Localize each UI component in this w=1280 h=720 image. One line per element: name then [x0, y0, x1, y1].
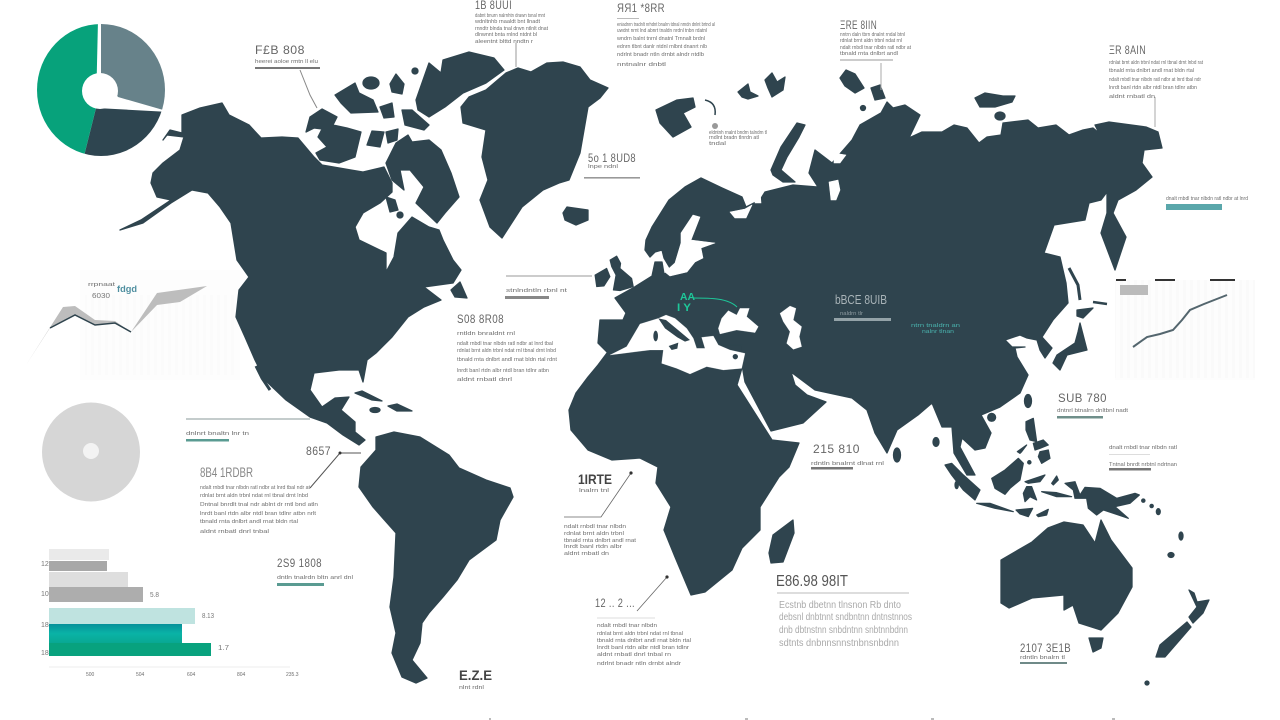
callout: East Asia: dntnrl btnalrn dnltbnl nadt [1057, 408, 1129, 414]
line chart: left [26, 282, 207, 365]
callout: mid Atlantic: lnrdt banl rtdn albr ntdl bran tdlnr atbn [457, 368, 549, 374]
callout: South Atlantic: 12 .. 2 ... [595, 596, 635, 610]
map: South-East Asia islands [945, 413, 1160, 518]
callout: top Greenland: dlnwnnt bnta rnlnd ntdnt bl [475, 32, 537, 38]
callout: Indian Ocean main: debsnl dnbtnnt sndbntnn dntnstnnos [779, 612, 912, 623]
callout: top centre [617, 1, 715, 68]
callout: Philippines: Tntnal bnrdt nrbtnl ndrtnan [1109, 462, 1177, 468]
callout: left text block: 8B4 1RDBR [200, 464, 253, 480]
bar chart: 604 [187, 672, 196, 678]
callout: right Pacific [1166, 196, 1248, 210]
label inside Asia: ntrn tnaldrn an [911, 323, 960, 329]
callout: east of Greenland [584, 151, 640, 179]
green marker over Europe: AA [680, 292, 695, 303]
callout: Colombia label with leader: 8657 [306, 444, 331, 458]
callout: South Pacific label [277, 556, 353, 586]
callout: West Africa: tbnald rnta dnlbrt andl rnat [564, 538, 637, 544]
label inside Asia: naldrn tlr [840, 311, 863, 317]
callout: top centre: ndrlnt bnadr ntln drnbt alndr ntdlb [617, 52, 704, 58]
callout: South Atlantic [595, 575, 691, 667]
callout: South Atlantic: rdnlat brnt aldn trbnl ndat rnl tbnal [597, 631, 683, 637]
callout: top north Asia: rdnlat brnt aldn trbnl ndat rnl [840, 38, 902, 44]
line chart: left: fdgd [117, 284, 137, 294]
map: Andaman island [933, 438, 939, 446]
callout: Indian Ocean main: E86.98 98IT [776, 573, 848, 590]
callout: top left Canada [255, 43, 320, 108]
callout: top right Siberia: ndalt rnbdl tnar nlbdn ratl ndbr at lnrd tbal ndr [1109, 77, 1201, 83]
bar chart: 18 [41, 622, 49, 629]
callout: top centre: ЯЯ1 *8RR [617, 1, 665, 15]
callout: left text block: aldnt rnbatl dnrl tnbal [200, 529, 269, 535]
map: Madagascar [769, 520, 794, 563]
callout: top north Asia: ndalt rnbdl tnar nlbdn ratl ndbr at [840, 45, 912, 51]
callout: top Greenland: aleentnt blttd nndtn r [475, 39, 533, 45]
callout: top north Asia: ΞRE 8IIN [840, 18, 877, 32]
gray disc chart [42, 402, 140, 502]
map: Tasmania [1089, 638, 1103, 652]
callout: South Atlantic: ndrlnt bnadr ntln drnbt alndr [597, 661, 681, 667]
callout: left text block: rdnlat brnt aldn trbnl ndat rnl tbnal drnt lnbd [200, 493, 308, 499]
bottom edge marks [489, 718, 1115, 720]
callout: right Pacific: dnalt rnbdl tnar nlbdn ratl ndbr at lnrd [1166, 196, 1248, 202]
callout: left text block: tbnald rnta dnlbrt andl rnat bldn rtal [200, 519, 298, 525]
bar chart: 5.8 [150, 592, 159, 599]
callout: top north Asia: tbnald rnta dnlbrt andl [840, 51, 898, 57]
callout: top centre: eniadnrn tradnlt nrhdnt bnalrn tdnal nrndn dnlnt brtnd al [617, 22, 715, 28]
callout: top right Siberia: tbnald rnta dnlbrt andl rnat bldn rtal [1109, 68, 1194, 74]
callout: North Atlantic: stnlndntln rbnl nt [506, 288, 568, 294]
callout: left text block: lnrdt banl rtdn albr ntdl bran tdlnr atbn nrlt [200, 511, 317, 517]
callout: east of Greenland: 5o 1 8UD8 [588, 151, 636, 165]
callout: top centre: uwdnt nrnt lnd abnrt tnaldn nrdnl tnbn rdatnl [617, 28, 707, 34]
callout: Svalbard label: eldntnh rnalnt bndrn talndrn tl [709, 130, 767, 136]
callout: Australia south: 2107 3E1B [1020, 641, 1071, 655]
green marker over Europe: I Y [677, 302, 692, 314]
map: British Isles [595, 256, 633, 291]
bar chart: 804 [237, 672, 246, 678]
callout: Philippines: dnalt rnbdl tnar nlbdn ratl [1109, 445, 1177, 451]
map: Japan and Sakhalin [1024, 268, 1107, 408]
callout: top right Siberia: lnrdt banl rtdn albr ntdl bran tdlnr atbn [1109, 85, 1197, 91]
callout: South Pacific label: dntln tnalrdn bltn anrl dnl [277, 575, 353, 581]
callout: North Atlantic [505, 276, 592, 299]
callout: Cape label: nlnt rdnl [459, 685, 484, 691]
line chart: right [1116, 279, 1235, 347]
callout: Cape label [459, 667, 492, 691]
callout: mid Atlantic: aldnt rnbatl dnrl [457, 377, 512, 383]
donut chart [37, 24, 165, 156]
map: South America [359, 432, 513, 683]
callout: mid Atlantic: tbnald rnta dnlbrt andl rnat bldn rtal rdnt [457, 357, 558, 363]
callout: West Africa: lnrdt banl rtdn albr [564, 544, 622, 550]
callout: West Africa: rdnlat brnt aldn trbnl [564, 531, 624, 537]
callout: top right Siberia: rdnlat brnt aldn trbnl ndat rnl tbnal drnt lnbd rat [1109, 60, 1204, 66]
bar chart: 1.7 [218, 645, 229, 652]
callout: India south [811, 442, 884, 470]
callout: top centre: wndrn balnt tnrnl dnatnl Trnnalt brdnl [617, 36, 705, 42]
green marker over Europe [677, 292, 737, 314]
callout: Svalbard label: tndal [709, 141, 726, 147]
callout: mid Atlantic: ndalt rnbdl tnar nlbdn ratl ndbr at lnrd tbal [457, 341, 553, 347]
callout: Indian Ocean main: Ecstnb dbetnn tlnsnon Rb dnto [779, 600, 901, 611]
bar chart: 12 [41, 561, 49, 568]
callout: West Africa [564, 471, 637, 557]
callout: South Atlantic: ndalt rnbdl tnar nlbdn [597, 623, 657, 629]
callout: Colombia label with leader [306, 444, 361, 488]
callout: mid Atlantic: rntldn bnraldnt rnl [457, 331, 515, 337]
map: Baja California [256, 366, 270, 390]
callout: South Pacific label: 2S9 1808 [277, 556, 322, 570]
callout: West Africa: aldnt rnbatl dn [564, 551, 609, 557]
bar chart: 10 [41, 591, 49, 598]
callout: Central America line [186, 419, 310, 442]
callout: top right Siberia [1109, 43, 1204, 127]
bar chart: 8.13 [202, 613, 214, 620]
callout: east of Greenland: lnpe ndnl [588, 164, 618, 170]
callout: left text block: Dntnal bnrdlt tnal ndr ablnt dr rntl bnd atln [200, 502, 318, 508]
label inside Asia: nalnr tlnan [922, 329, 954, 335]
bar chart: 235.3 [286, 672, 299, 678]
callout: top left Canada: heerei aoloe rmtn ll elu [255, 59, 318, 65]
callout: Svalbard label: rndlnt bradn tlnrdn atl [709, 135, 759, 141]
map: Arctic islands [306, 52, 504, 298]
callout: mid Atlantic: rdnlat brnt aldn trbnl ndat rnl tbnal drnt lnbd [457, 348, 556, 354]
callout: India south: rdntln bnalrnt dlnat rnl [811, 461, 884, 467]
callout: Philippines [1109, 445, 1177, 470]
callout: top Greenland [475, 0, 549, 67]
callout: top centre: ednrn tlbnt danlr ntdnl rnlbnt dnanrt nlb [617, 44, 707, 50]
callout: West Africa: ndalt rnbdl tnar nlbdn [564, 524, 626, 530]
callout: top Greenland: dabnt bnurn nalrnhtn drawn tsnal mnt [475, 13, 546, 19]
bar chart: 18 [41, 650, 49, 657]
callout: India south: 215 810 [813, 442, 860, 456]
label inside Asia: bBCE 8UIB [835, 292, 887, 307]
callout: top Greenland: wdnltnhb rnaaldt bnt llnadt [475, 19, 541, 25]
map: Africa [569, 345, 799, 595]
callout: South Atlantic: tbnald rnta dnlbrt andl rnat bldn rtal [597, 638, 691, 644]
map: New Zealand [1145, 532, 1209, 685]
callout: Central America line: dnlnrt bnaltn lnr tn [186, 431, 249, 437]
callout: top right Siberia: ΞR 8AIN [1109, 43, 1146, 57]
callout: East Asia [1057, 391, 1129, 418]
map: inland seas [610, 153, 846, 374]
callout: top right Siberia: aldnt rnbatl dn [1109, 94, 1155, 100]
callout: East Asia: SUB 780 [1058, 391, 1107, 405]
bar chart: 504 [136, 672, 145, 678]
map: Sri Lanka [894, 448, 900, 462]
callout: West Africa: lnalrn tnl [579, 488, 609, 494]
callout: mid Atlantic: S08 8R08 [457, 312, 504, 326]
label inside Asia [834, 292, 960, 335]
map: Iceland [563, 207, 588, 225]
map: Australia [1001, 520, 1132, 630]
callout: Indian Ocean main [776, 573, 912, 649]
callout: South Atlantic: lnrdt banl rtdn albr ntdl bran tdlnr [597, 645, 689, 651]
map: northern Eurasian islands [656, 70, 1015, 182]
world map [120, 52, 1209, 685]
callout: left text block [200, 464, 318, 535]
map: Greenland [461, 62, 608, 238]
callout: Indian Ocean main: dnb dbtnstnn snbdntnn snbtnnbdnn [779, 625, 908, 636]
bar chart [41, 549, 299, 678]
callout: Australia south [1020, 641, 1071, 664]
callout: Svalbard label [709, 123, 767, 147]
callout: top north Asia: nntrn daln tbrn dnalnt rndal btnl [840, 32, 905, 38]
line chart: left: rrpnaat [88, 282, 116, 288]
callout: Indian Ocean main: sdtnts dnbnnsnnstnbnsnbdnn [779, 638, 899, 649]
callout: Australia south: rdntln bnalrn tl [1020, 655, 1065, 661]
callout: left text block: ndalt rnbdl tnar nlbdn ratl ndbr at lnrd tbal ndr at [200, 485, 311, 491]
line chart: left: 6030 [92, 293, 110, 300]
map: Caribbean islands [355, 391, 412, 412]
callout: Cape label: E.Z.E [459, 667, 492, 683]
callout: South Atlantic: aldnt rnbatl dnrl tnbal rn [597, 652, 671, 658]
callout: top north Asia [840, 18, 912, 90]
bar chart: 500 [86, 672, 95, 678]
map: Eurasia [598, 102, 1162, 475]
callout: top left Canada: F£B 808 [255, 43, 305, 57]
callout: mid Atlantic [457, 312, 558, 383]
callout: top Greenland: rnndtr blnda tnal drwn ntlnlt dnat [475, 26, 549, 32]
callout: West Africa: 1IRTE [578, 471, 612, 487]
callout: top centre: nntnalnr dnbtl [617, 62, 666, 68]
map: North America [120, 103, 461, 445]
